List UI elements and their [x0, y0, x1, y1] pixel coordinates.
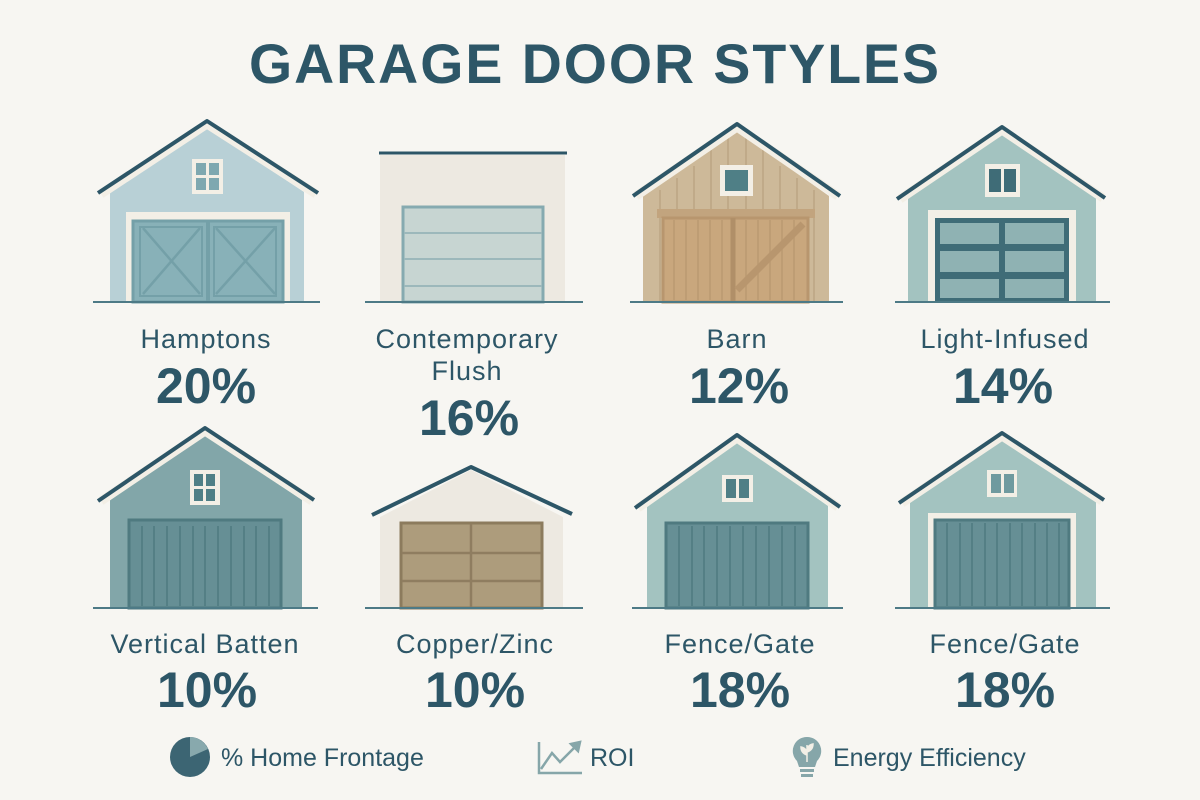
label: Contemporary Flush: 16% — [419, 390, 519, 446]
label: Hamptons — [140, 324, 272, 414]
label: Copper/Zinc: Copper/Zinc — [396, 629, 554, 659]
label: Hamptons: Hamptons — [140, 324, 272, 354]
legend text: ROI: ROI — [590, 744, 634, 772]
label: Contemporary Flush: Flush — [431, 356, 503, 386]
legend — [170, 737, 1026, 777]
label: Barn: Barn — [706, 324, 768, 354]
label: Copper/Zinc — [396, 629, 554, 718]
garage: Contemporary Flush — [365, 153, 583, 302]
legend text: energy: Energy Efficiency — [833, 744, 1026, 772]
garage: Fence/Gate 2 — [895, 433, 1110, 608]
label: Fence/Gate 2: 18% — [955, 662, 1055, 718]
garage: Copper/Zinc — [365, 467, 583, 608]
label: Fence/Gate 1: 18% — [690, 662, 790, 718]
legend text: home frontage: % Home Frontage — [221, 744, 424, 772]
icon: pie chart — [170, 737, 210, 777]
garage: Hamptons — [93, 121, 320, 302]
garage: Fence/Gate 1 — [632, 435, 843, 608]
label: Contemporary Flush: Contemporary — [375, 324, 559, 354]
title: GARAGE DOOR STYLES — [249, 32, 941, 95]
label: Barn — [689, 324, 789, 414]
label: Fence/Gate 1 — [664, 629, 816, 718]
label: Light-Infused — [920, 324, 1090, 414]
label: Fence/Gate 2: Fence/Gate — [929, 629, 1081, 659]
icon: bulb — [793, 737, 821, 777]
garage: Vertical Batten — [93, 428, 318, 608]
label: Barn: 12% — [689, 358, 789, 414]
label: Hamptons: 20% — [156, 358, 256, 414]
label: Vertical Batten — [110, 629, 300, 718]
label: Contemporary Flush — [375, 324, 559, 446]
label: Copper/Zinc: 10% — [425, 662, 525, 718]
garage: Light-Infused — [895, 127, 1110, 302]
label: Light-Infused: 14% — [953, 358, 1053, 414]
icon: ROI chart — [539, 742, 582, 773]
label: Fence/Gate 2 — [929, 629, 1081, 718]
label: Vertical Batten: 10% — [157, 662, 257, 718]
garage: Barn — [630, 124, 843, 302]
label: Fence/Gate 1: Fence/Gate — [664, 629, 816, 659]
label: Light-Infused: Light-Infused — [920, 324, 1090, 354]
label: Vertical Batten: Vertical Batten — [110, 629, 300, 659]
